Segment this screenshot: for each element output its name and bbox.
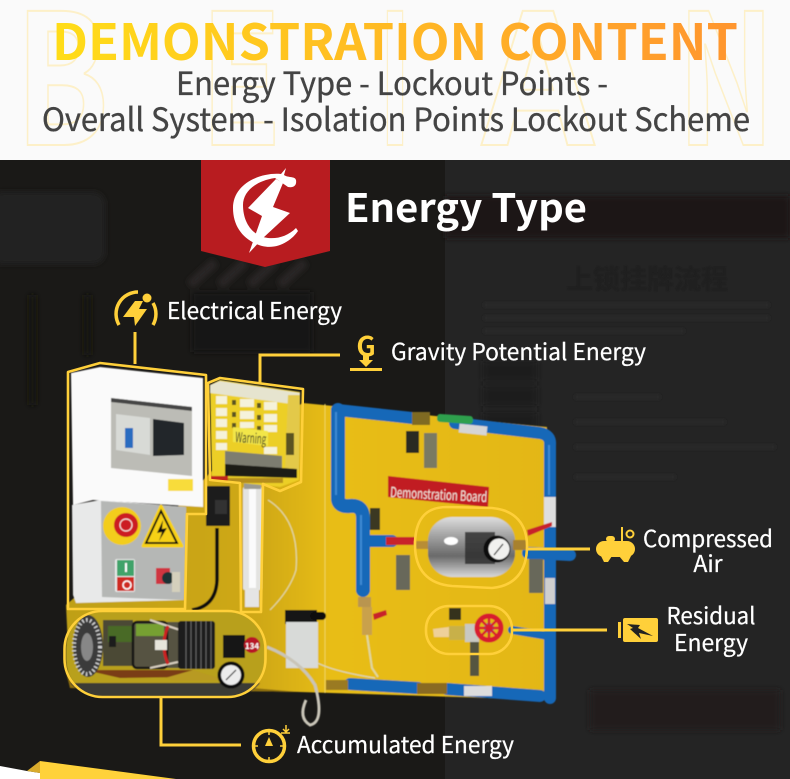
callout: accumulated energy: Accumulated Energy	[297, 726, 514, 760]
watermark letters	[15, 0, 775, 198]
black sensor and cable	[192, 486, 230, 610]
callout: gravity potential energy: Gravity Potential Energy	[391, 333, 646, 367]
header background	[0, 0, 790, 160]
demonstration board	[66, 367, 570, 725]
air tank	[414, 517, 527, 577]
callout: compressed air: Compressed	[643, 520, 773, 554]
tags and QR codes	[424, 433, 437, 468]
red valves	[386, 537, 416, 545]
icon: lightning C logo	[233, 168, 298, 253]
line: gravity	[260, 355, 340, 384]
warning triangle	[143, 506, 182, 546]
key switch	[156, 568, 180, 592]
icon: electric circle	[116, 292, 156, 326]
subtitle: Overall System - Isolation Points Lockout Scheme	[42, 95, 750, 141]
connector lines	[135, 332, 607, 745]
line: residual energy	[512, 628, 607, 632]
outline: gate valve	[426, 606, 512, 654]
start stop switch	[115, 559, 135, 592]
outline: compressor	[64, 611, 266, 697]
callout outlines	[64, 363, 527, 697]
callout: residual energy: Residual	[666, 597, 756, 631]
compressor: 134	[245, 641, 259, 652]
subtitle	[42, 59, 750, 141]
gravity box	[210, 380, 300, 487]
callout: gravity potential energy	[350, 325, 646, 371]
gravity box: Warning	[235, 427, 267, 449]
icon: gravity G arrow	[350, 325, 382, 371]
title: DEMONSTRATION CONTENT	[52, 3, 738, 75]
callout: residual energy: Energy	[674, 624, 748, 658]
icon: gravity G arrow: G	[356, 325, 376, 364]
icon: gauge timer	[254, 725, 290, 762]
callout: residual energy	[618, 597, 756, 658]
blue pipes	[338, 410, 570, 698]
line: electrical	[134, 332, 136, 364]
demonstration board label	[388, 476, 489, 507]
blurred background heading: 上锁挂牌流程	[566, 258, 728, 297]
callout: compressed air	[596, 520, 773, 579]
bottom corner ribbon	[0, 761, 176, 779]
electrical cabinet	[71, 367, 203, 603]
line: accumulated energy	[161, 697, 241, 745]
red banner	[201, 160, 330, 267]
callout: compressed air: Air	[693, 545, 723, 579]
emergency stop	[103, 507, 141, 545]
pneumatic block	[285, 610, 326, 668]
icon: air compressor	[596, 527, 635, 562]
dark blurred background panel	[0, 160, 790, 779]
callout: electrical energy: Electrical Energy	[167, 292, 342, 326]
demonstration board label: Demonstration Board	[390, 482, 488, 507]
compressor	[66, 612, 264, 696]
icon: battery	[618, 618, 658, 642]
outline: gravity	[208, 378, 303, 612]
line: compressed air	[527, 548, 590, 550]
gate valve	[433, 616, 501, 642]
outline: air tank	[415, 507, 527, 588]
outline: electrical	[68, 363, 206, 609]
heading: Energy Type: Energy Type	[345, 178, 587, 234]
cylinder under the gravity box	[243, 481, 296, 610]
subtitle: Energy Type - Lockout Points -	[176, 59, 608, 105]
